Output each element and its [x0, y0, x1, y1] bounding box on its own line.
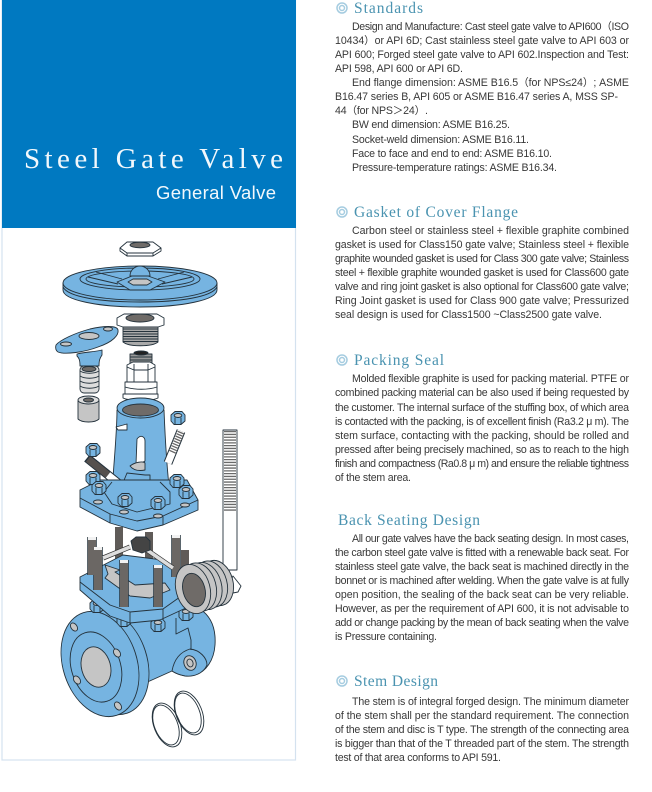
- text: stem body: test of that area conforms to API 591.: [335, 752, 501, 764]
- text: standards body: Socket-weld dimension: ASME B16.11.: [352, 134, 529, 146]
- text: standards body: B16.47 series B, API 605 or ASME B16.47 series A, MSS SP-: [335, 91, 618, 103]
- text: gasket body: valve and ring joint gasket is also optional for Class600 gate valve;: [335, 281, 629, 293]
- heading: back seating: Back Seating Design: [338, 512, 480, 529]
- heading: stem design: Stem Design: [354, 673, 438, 690]
- text: gasket body: [335, 225, 629, 321]
- section: stem design: [335, 673, 629, 764]
- text: packing body: stem surface, contacting with the packing, should be rolled and: [335, 430, 629, 442]
- text: standards body: 10434）or API 6D; Cast stainless steel gate valve to API 603 or: [335, 34, 629, 47]
- text: packing body: pressed after being precisely machined, so as to reach to the high: [335, 444, 629, 456]
- text: packing body: of the stem area.: [335, 472, 411, 484]
- text: stem body: [335, 696, 629, 764]
- section: back seating design: [335, 512, 630, 643]
- section: gasket of cover flange: [335, 204, 629, 321]
- seat rings: [146, 687, 210, 751]
- text: gasket body: gasket is used for Class150 gate valve; Stainless steel + flexible: [335, 239, 629, 251]
- subtitle: General Valve: [156, 182, 276, 203]
- title: Steel Gate Valve: [24, 143, 283, 175]
- long threaded stud: [223, 430, 241, 594]
- gate wedge: [170, 557, 238, 618]
- packing sleeve: [78, 396, 99, 422]
- text: back seating body: is Pressure containing.: [335, 631, 437, 643]
- text: stem body: is bigger than that of the T threaded part of the stem. The strength: [335, 738, 629, 750]
- text: packing body: [335, 373, 630, 484]
- exploded valve illustration: [48, 242, 241, 751]
- bonnet column: [112, 398, 170, 495]
- text: packing body: the customer. The internal surface of the stuffing box, of which area: [335, 402, 629, 414]
- gland flange plate: [56, 326, 118, 366]
- yoke nut assembly: [123, 351, 158, 400]
- bonnet flange with nuts: [80, 472, 198, 531]
- text: gasket body: seal design is used for Class1500 ~Class2500 gate valve.: [335, 309, 602, 321]
- text: back seating body: However, as per the requirement of API 600, it is not advisable to: [335, 603, 629, 615]
- left panel background: [2, 0, 296, 760]
- text: back seating body: bonnet or is machined after welding. When the gate valve is at fully: [335, 575, 630, 587]
- text: standards body: BW end dimension: ASME B16.25.: [352, 119, 510, 131]
- text: standards body: 44（for NPS＞24）.: [335, 104, 428, 117]
- text: back seating body: [335, 533, 630, 643]
- text: gasket body: graphite wounded gasket is used for Class 300 gate valve; Stainless: [335, 253, 629, 265]
- section: packing seal: [335, 352, 630, 484]
- text: standards body: Pressure-temperature ratings: ASME B16.34.: [352, 162, 557, 174]
- text: back seating body: open position, the sealing of the back seat can be very reliable.: [335, 589, 629, 601]
- text: stem body: of the stem and disc is T type. The strength of the connecting area: [335, 724, 629, 736]
- handwheel: [63, 266, 217, 307]
- title banner: [2, 0, 296, 228]
- packing spring: [80, 366, 99, 393]
- text: gasket body: steel + flexible graphite wounded gasket is used for Class600 gate: [335, 267, 629, 279]
- section: standards: [335, 0, 629, 174]
- text: back seating body: add or change packing by the mean of back seating when the valve: [335, 617, 629, 629]
- text: packing body: finish and compactness (Ra0.8 μ m) and ensure the reliable tightness: [335, 458, 629, 470]
- text: back seating body: stainless steel gate valve, the back seat is machined directly in the: [335, 561, 629, 573]
- top hex nut: [120, 242, 161, 256]
- text: back seating body: the carbon steel gate valve is fitted with a renewable back seat. For: [335, 547, 629, 559]
- text: standards body: Face to face and end to end: ASME B16.10.: [352, 148, 552, 160]
- text: stem body: The stem is of integral forged design. The minimum diameter: [352, 696, 629, 708]
- text: standards body: Design and Manufacture: Cast steel gate valve to API600（ISO: [352, 20, 629, 33]
- threaded gland bushing: [117, 314, 164, 346]
- text: back seating body: All our gate valves have the back seating design. In most cases,: [352, 533, 629, 545]
- text: gasket body: Carbon steel or stainless steel + flexible graphite combined: [352, 225, 629, 237]
- text: stem body: of the stem shall per the standard requirement. The connection: [335, 710, 629, 722]
- text: standards body: [335, 20, 629, 174]
- text: standards body: API 598, API 600 or API 6D.: [335, 63, 463, 75]
- lower bonnet flange with studs: [80, 527, 188, 623]
- heading: gasket: Gasket of Cover Flange: [354, 204, 518, 221]
- text: packing body: is contacted with the packing, is of excellent finish (Ra3.2 μ m). The: [335, 416, 629, 428]
- heading: packing seal: Packing Seal: [354, 352, 444, 369]
- text: packing body: Molded flexible graphite is used for packing material. PTFE or: [352, 373, 629, 385]
- text: standards body: End flange dimension: ASME B16.5（for NPS≤24）; ASME: [352, 76, 629, 89]
- lower body and end flange: [48, 599, 215, 727]
- tilted threaded bolts: [86, 412, 185, 483]
- text: packing body: combined packing material can be also used if being requested by: [335, 387, 630, 399]
- heading: standards: Standards: [354, 0, 423, 17]
- text: gasket body: Ring Joint gasket is used for Class 900 gate valve; Pressurized: [335, 295, 629, 307]
- text: standards body: API 600; Forged steel gate valve to API 602.Inspection and Test:: [335, 49, 629, 61]
